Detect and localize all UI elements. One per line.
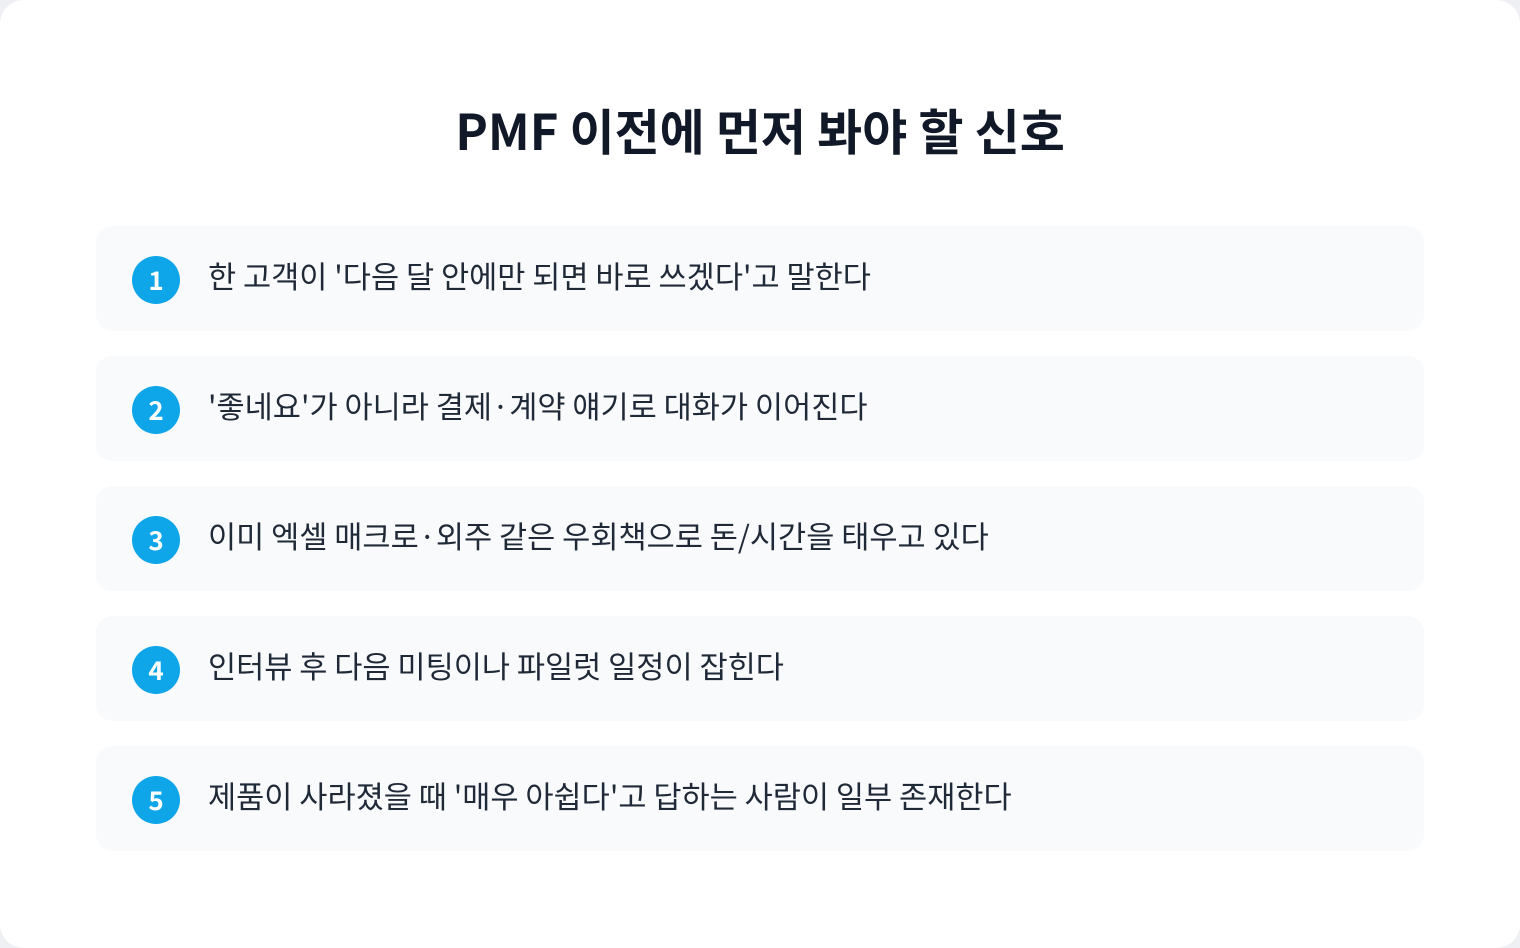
- badge 1: [132, 256, 180, 304]
- badge 5: [132, 776, 180, 824]
- badge 3: [132, 516, 180, 564]
- text 2: '좋네요'가 아니라 결제·계약 얘기로 대화가 이어진다: [208, 383, 868, 427]
- text 1: 한 고객이 '다음 달 안에만 되면 바로 쓰겠다'고 말한다: [208, 253, 871, 297]
- badge 4: 4: [148, 651, 164, 688]
- panel: signal 4: [96, 616, 1424, 721]
- badge 2: [132, 386, 180, 434]
- title: PMF 이전에 먼저 봐야 할 신호: [455, 94, 1065, 165]
- badge 1: 1: [148, 261, 164, 298]
- panel: signal 1: [96, 226, 1424, 331]
- text 5: 제품이 사라졌을 때 '매우 아쉽다'고 답하는 사람이 일부 존재한다: [208, 773, 1012, 817]
- text 3: 이미 엑셀 매크로·외주 같은 우회책으로 돈/시간을 태우고 있다: [208, 513, 989, 557]
- badge 4: [132, 646, 180, 694]
- panel: signal 2: [96, 356, 1424, 461]
- text 4: 인터뷰 후 다음 미팅이나 파일럿 일정이 잡힌다: [208, 643, 784, 687]
- panel: signal 3: [96, 486, 1424, 591]
- badge 5: 5: [148, 781, 164, 818]
- panel: signal 5: [96, 746, 1424, 851]
- badge 2: 2: [148, 391, 164, 428]
- badge 3: 3: [148, 521, 164, 558]
